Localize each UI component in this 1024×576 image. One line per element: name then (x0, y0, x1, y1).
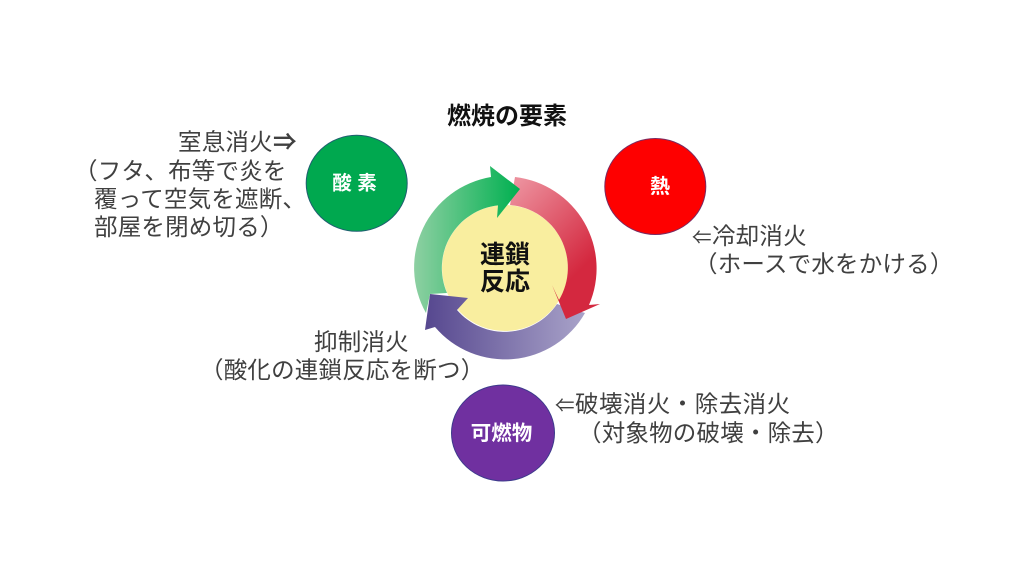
text: smothering (74, 129, 306, 240)
text: smothering: 室息消火 (178, 129, 273, 155)
text: inhibition: （酸化の連鎖反応を断つ） (200, 357, 484, 383)
arrow: red (510, 177, 600, 319)
text: cooling (692, 223, 954, 277)
circle: oxygen: 酸 素 (332, 172, 377, 194)
text: smothering: 部屋を閉め切る） (94, 214, 284, 240)
circle: fuel (452, 385, 554, 481)
text: smothering: ⇒ (273, 129, 297, 155)
text: removal: ⇐ (555, 395, 575, 417)
title: 燃焼の要素 (447, 103, 567, 130)
text: removal: 破壊消火・除去消火 (575, 391, 791, 417)
center label: 反応 (480, 268, 530, 296)
circle: oxygen (306, 135, 407, 231)
text: removal (555, 391, 839, 446)
circle: heat: 熱 (650, 175, 670, 198)
text: smothering: 覆って空気を遮断、 (94, 186, 306, 212)
text: cooling: ⇐ (692, 227, 712, 249)
center label: 連鎖 (480, 241, 530, 269)
cycle diagram: chain reaction (414, 166, 600, 359)
text: inhibition: 抑制消火 (314, 329, 409, 355)
circle: heat (605, 138, 706, 234)
text: smothering: （フタ、布等で炎を (74, 158, 287, 184)
arrow: purple (425, 294, 585, 359)
arrow: green (414, 166, 520, 313)
text: cooling: 冷却消火 (712, 223, 807, 249)
text: removal: （対象物の破壊・除去） (578, 420, 839, 446)
text: cooling: （ホースで水をかける） (694, 251, 954, 277)
text: inhibition (200, 329, 484, 383)
center circle (442, 205, 568, 331)
circle: fuel: 可燃物 (471, 422, 532, 445)
